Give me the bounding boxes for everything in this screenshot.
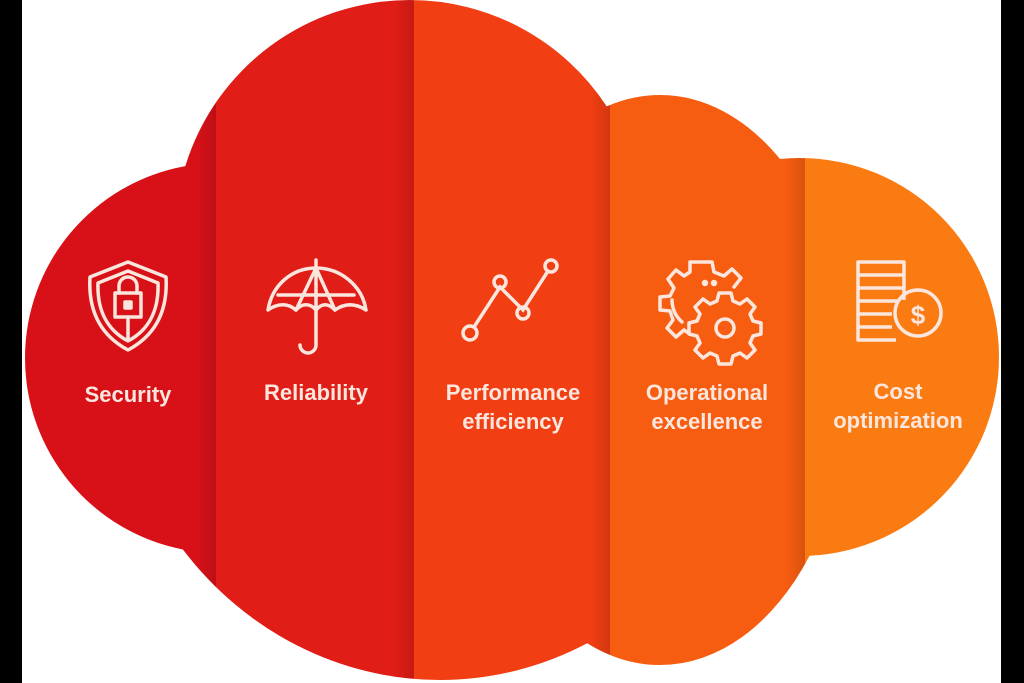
icon: coins stack: $	[911, 300, 926, 330]
label: Cost optimization: optimization	[833, 408, 963, 433]
label: Operational excellence: excellence	[651, 409, 763, 434]
icon: umbrella	[268, 260, 366, 353]
icon: shield lock	[90, 262, 166, 350]
icon: gears	[660, 262, 761, 364]
label: Performance efficiency: efficiency	[462, 409, 565, 434]
label: Cost optimization: Cost	[874, 379, 923, 404]
label: Performance efficiency: Performance	[446, 380, 580, 405]
label: Reliability: Reliability	[264, 380, 369, 405]
label: Operational excellence: Operational	[646, 380, 768, 405]
icon: coins stack	[858, 262, 941, 340]
label: Security: Security	[85, 382, 172, 407]
icon: line chart	[463, 260, 557, 340]
